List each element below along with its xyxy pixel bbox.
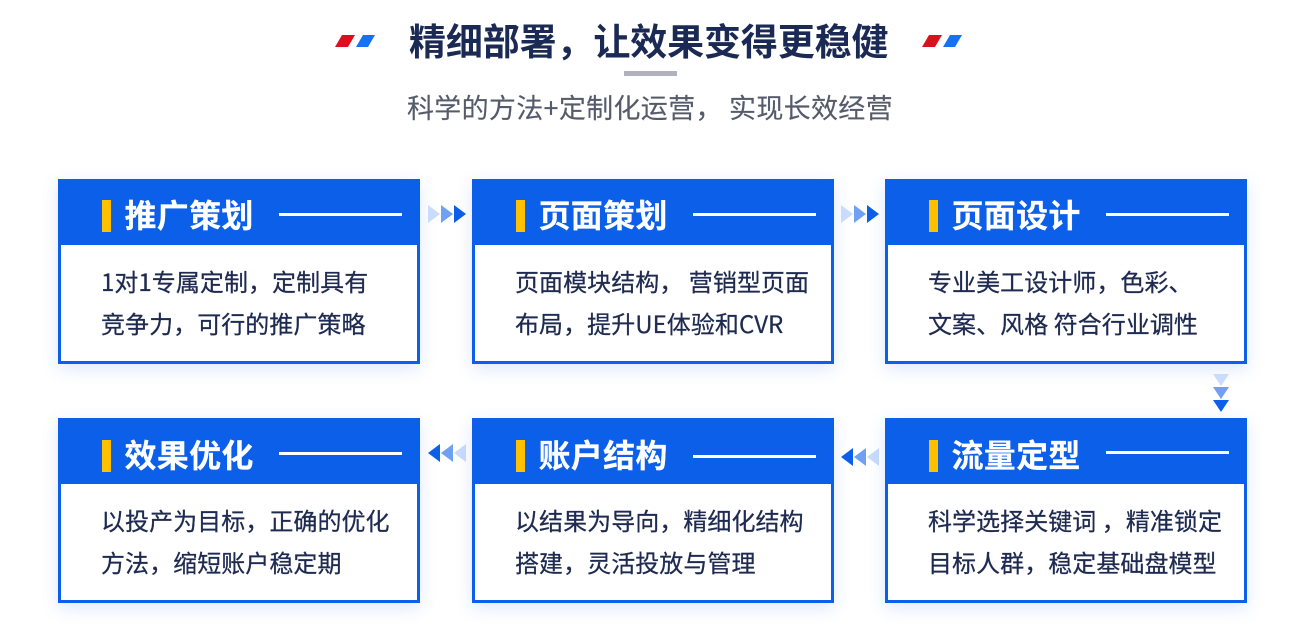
panel text: 竞争力，可行的推广策略: [101, 304, 366, 340]
arrow: down: [1213, 374, 1229, 412]
panel: 效果优化: [58, 418, 420, 603]
accent bar: [102, 440, 111, 472]
panel header: [58, 418, 420, 484]
title underline: [624, 71, 677, 76]
heading: 推广策划: [124, 191, 254, 237]
accent bar: [516, 200, 525, 232]
arrow: left 2: [428, 444, 466, 462]
panel text: [515, 502, 804, 578]
panel text: 搭建，灵活投放与管理: [515, 544, 756, 578]
panel text: [101, 263, 368, 340]
panel header: [58, 179, 420, 245]
panel: 推广策划: [58, 179, 420, 364]
panel text: [928, 263, 1198, 340]
panel text: 专业美工设计师，色彩、: [928, 263, 1193, 298]
heading: 账户结构: [538, 431, 668, 477]
panel header: [472, 179, 834, 245]
panel header: [885, 179, 1247, 245]
header line: [1106, 451, 1229, 454]
icon: left title stripes: [335, 35, 375, 47]
accent bar: [929, 440, 938, 472]
accent bar: [102, 200, 111, 232]
panel header: [885, 418, 1247, 484]
subtitle: 科学的方法+定制化运营， 实现长效经营: [407, 87, 893, 126]
panel text: 页面模块结构， 营销型页面: [515, 263, 809, 298]
panel text: 以投产为目标，正确的优化: [101, 502, 390, 537]
panel text: 文案、风格 符合行业调性: [928, 304, 1198, 340]
heading: 页面策划: [538, 191, 668, 237]
arrow: right 2: [841, 205, 879, 223]
panel: 页面策划: [472, 179, 834, 364]
panel text: 布局，提升UE体验和CVR: [515, 304, 783, 340]
header line: [693, 455, 816, 458]
header line: [279, 213, 402, 216]
panel text: [928, 502, 1222, 578]
icon: right title stripes: [922, 35, 962, 47]
header line: [1106, 213, 1229, 216]
panel text: 科学选择关键词 ，精准锁定: [928, 502, 1222, 537]
panel text: 方法，缩短账户稳定期: [101, 544, 342, 578]
arrow: right 1: [428, 205, 466, 223]
panel text: [515, 263, 809, 340]
panel: 流量定型: [885, 418, 1247, 603]
panel: 账户结构: [472, 418, 834, 603]
panel text: 目标人群，稳定基础盘模型: [928, 544, 1217, 578]
title: 精细部署，让效果变得更稳健: [409, 12, 888, 66]
panel text: [101, 502, 390, 578]
heading: 页面设计: [952, 191, 1081, 237]
panel text: 以结果为导向，精细化结构: [515, 502, 804, 537]
heading: 效果优化: [124, 431, 254, 477]
arrow: left 1: [841, 448, 879, 466]
panel: 页面设计: [885, 179, 1247, 364]
header line: [279, 452, 402, 454]
heading: 流量定型: [952, 431, 1081, 477]
accent bar: [516, 440, 525, 472]
header line: [693, 213, 816, 216]
accent bar: [929, 200, 938, 232]
panel text: 1对1专属定制，定制具有: [101, 263, 368, 298]
panel header: [472, 418, 834, 484]
